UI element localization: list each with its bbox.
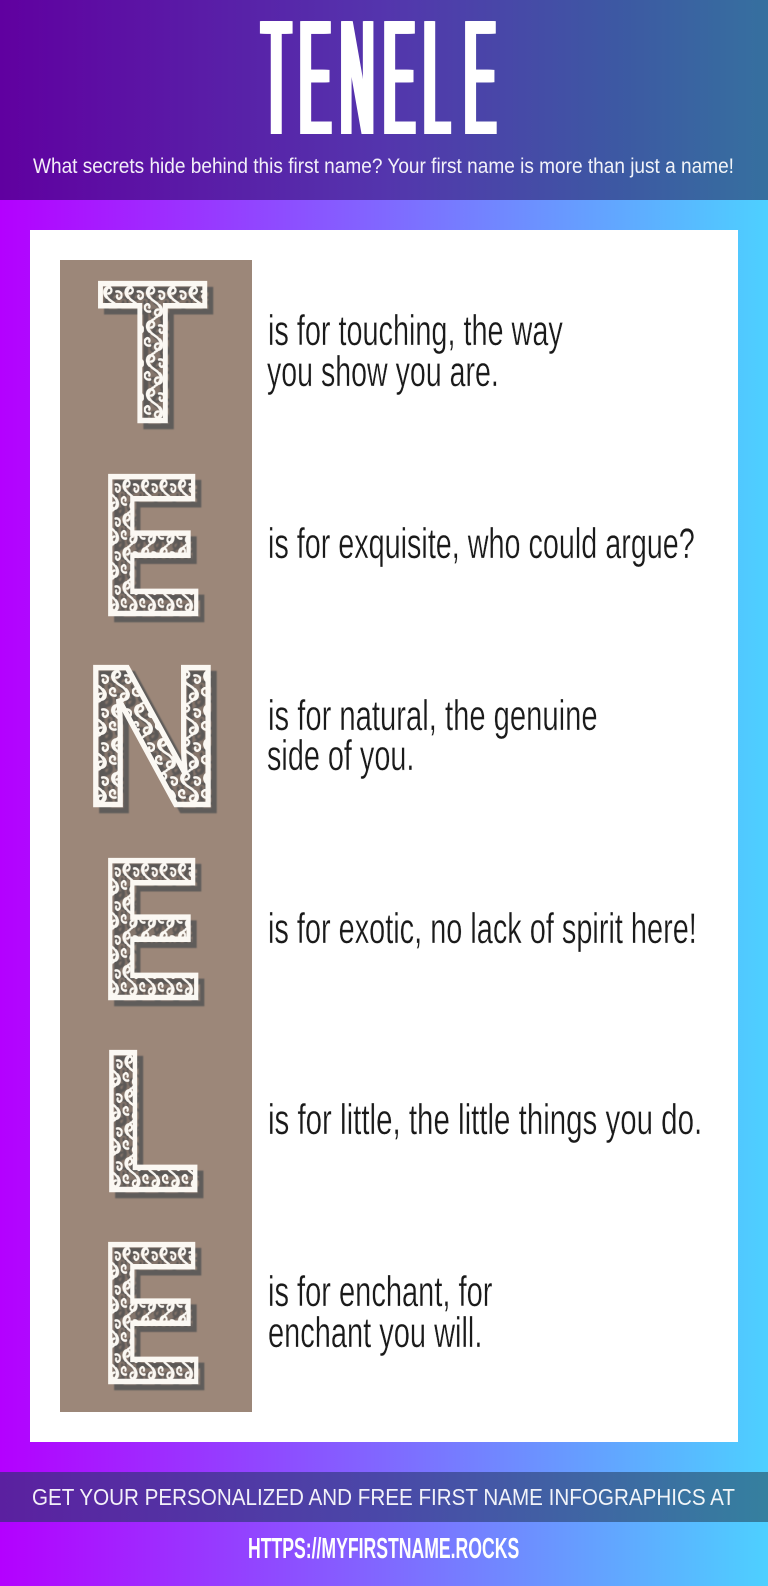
line for T: you show you are. bbox=[267, 347, 499, 395]
footer text: GET YOUR PERSONALIZED AND FREE FIRST NAME INFOGRAPHICS AT bbox=[32, 1485, 735, 1510]
panel: brown letter strip bbox=[60, 260, 252, 1412]
letter T: T bbox=[98, 240, 207, 463]
title bbox=[259, 0, 497, 169]
line for T bbox=[267, 306, 563, 395]
line for L: is for little, the little things you do. bbox=[268, 1095, 702, 1143]
line for E: is for exotic, no lack of spirit here! bbox=[268, 904, 697, 952]
footer band bbox=[0, 1472, 768, 1522]
letter E: E bbox=[100, 433, 202, 656]
letter E: E bbox=[100, 817, 202, 1040]
footer url: HTTPS://MYFIRSTNAME.ROCKS bbox=[248, 1533, 519, 1565]
line for E bbox=[268, 1267, 492, 1356]
line for E: is for enchant, for bbox=[268, 1267, 492, 1315]
line for E: is for exquisite, who could argue? bbox=[268, 519, 695, 567]
line for T: is for touching, the way bbox=[268, 306, 563, 354]
header band bbox=[0, 0, 768, 200]
line for E: enchant you will. bbox=[268, 1308, 482, 1356]
subtitle: What secrets hide behind this first name? Your first name is more than just a name! bbox=[33, 155, 734, 178]
panel: white content card bbox=[30, 230, 738, 1442]
letter L: L bbox=[100, 1009, 200, 1232]
letter E: E bbox=[100, 1201, 202, 1424]
line for N: side of you. bbox=[267, 731, 414, 779]
line for N bbox=[267, 691, 598, 779]
letter N: N bbox=[83, 625, 221, 847]
line for N: is for natural, the genuine bbox=[268, 691, 598, 739]
